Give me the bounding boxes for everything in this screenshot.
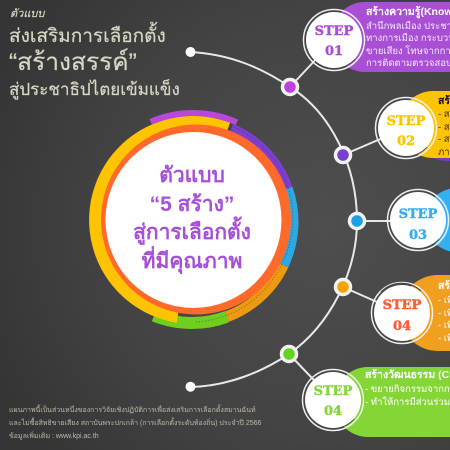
ring segment: blue (283, 189, 293, 265)
ring segment: green (154, 316, 227, 323)
ring segment: orange (227, 265, 283, 317)
ring heading: สู่การเลือกตั้ง (133, 216, 251, 246)
panel: step 5 (302, 367, 450, 437)
footer note: แผนภาพนี้เป็นส่วนหนึ่งของการวิจัยเชิงปฏิบัติการเพื่อส่งเสริมการเลือกตั้งสมานฉันท์ (9, 403, 256, 414)
step badge (304, 10, 364, 70)
orange ring (101, 124, 291, 314)
footer note: และไม่ซื้อสิทธิขายเสียง สถาบันพระปกเกล้า (การเลือกตั้งระดับท้องถิ่น) ประจำปี 2566 (9, 416, 261, 427)
pill text (438, 279, 450, 344)
panel: central ring (89, 113, 293, 323)
pill (410, 275, 450, 351)
panel: step 4 (372, 275, 450, 351)
ring stitching (195, 127, 293, 322)
ring heading: ตัวแบบ (159, 164, 225, 187)
title: ตัวแบบ (10, 8, 45, 20)
timeline arc (186, 40, 418, 400)
ring heading: “5 สร้าง” (150, 192, 234, 216)
step badge: STEP (314, 384, 353, 399)
pill (332, 2, 450, 72)
white disc (106, 132, 282, 308)
panel: step 1 (304, 2, 450, 72)
step badge: STEP (383, 298, 422, 313)
step badge: 02 (397, 134, 415, 149)
footer note (9, 403, 261, 440)
step badge (302, 370, 364, 430)
ring heading (133, 164, 251, 275)
timeline nodes (282, 80, 364, 362)
panel: step 2 (376, 91, 450, 161)
pill text (366, 5, 450, 69)
panel: step 3 (388, 188, 450, 252)
title: “สร้างสรรค์” (9, 48, 137, 76)
step badge: STEP (399, 207, 438, 222)
title (9, 8, 180, 100)
step badge: STEP (315, 24, 354, 39)
pill (410, 91, 450, 158)
pill text (438, 94, 450, 158)
ring segment: purple (231, 129, 287, 189)
step badge (388, 190, 448, 250)
title: ส่งเสริมการเลือกตั้ง (9, 22, 166, 47)
ring segment: yellow (89, 116, 230, 323)
title: สู่ประชาธิปไตยเข้มแข็ง (9, 78, 180, 100)
step badge: 01 (325, 44, 343, 59)
footer note: ข้อมูลเพิ่มเติม : www.kpi.ac.th (9, 431, 99, 440)
step badge: 03 (409, 228, 427, 243)
ring heading: ที่มีคุณภาพ (142, 245, 242, 275)
ring segment: magenta top (151, 113, 237, 122)
step badge (372, 282, 432, 344)
pill (434, 188, 450, 252)
step badge: STEP (387, 114, 426, 129)
step badge (376, 98, 436, 158)
step badge: 04 (324, 404, 342, 419)
step badge: 04 (393, 319, 411, 334)
pill shadow (434, 158, 450, 161)
pill (335, 367, 450, 437)
pill text (365, 368, 450, 408)
